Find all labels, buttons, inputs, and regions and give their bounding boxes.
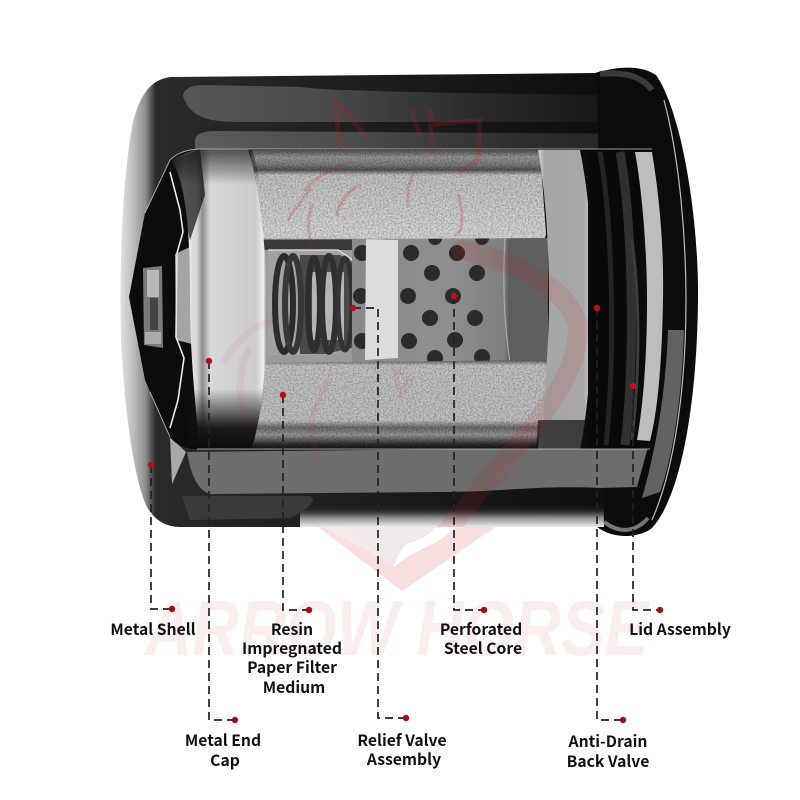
end cap crimp line xyxy=(170,172,184,428)
relief valve assembly xyxy=(264,239,352,363)
callout: anti-drain back valve: Back Valve xyxy=(567,749,649,772)
infographic: oil filter cutaway diagram xyxy=(112,68,731,770)
callout: resin impregnated paper filter medium: Impregnated xyxy=(242,636,342,659)
lid assembly gasket xyxy=(635,152,663,441)
callout: resin impregnated paper filter medium xyxy=(242,392,342,698)
callout: perforated steel core: Perforated xyxy=(440,617,522,640)
callout: resin impregnated paper filter medium: Paper Filter xyxy=(247,655,337,678)
resin paper filter lower xyxy=(250,360,548,449)
right silver band xyxy=(536,150,592,449)
perforated steel core xyxy=(352,231,548,366)
shell lower grey strip xyxy=(187,447,648,494)
callout: metal shell: Metal Shell xyxy=(110,617,196,640)
window edge line xyxy=(145,149,652,449)
callout: anti-drain back valve xyxy=(567,305,649,772)
white tape strip on core xyxy=(365,239,398,360)
shell cut highlight xyxy=(170,437,186,484)
shell lower sheen xyxy=(300,508,604,527)
resin paper filter upper xyxy=(250,150,546,240)
top shell highlight xyxy=(183,85,600,122)
callout: resin impregnated paper filter medium: Resin xyxy=(271,617,313,640)
shell left texture xyxy=(182,496,313,520)
callout: metal shell xyxy=(110,462,196,640)
callout: metal end cap xyxy=(185,358,261,771)
end cap inner nut xyxy=(143,246,196,348)
watermark: red horse emblem over filter xyxy=(225,100,578,540)
callout: relief valve assembly: Relief Valve xyxy=(357,728,447,751)
callout: anti-drain back valve: Anti-Drain xyxy=(568,729,647,752)
filter flange xyxy=(595,68,698,536)
callout: relief valve assembly xyxy=(350,305,447,770)
anti-drain back valve xyxy=(588,149,640,449)
filter grain xyxy=(250,150,548,449)
watermark text: ARROW HORSE xyxy=(143,584,650,672)
callout: metal end cap: Cap xyxy=(210,748,240,771)
cutaway window xyxy=(129,149,664,449)
callout: resin impregnated paper filter medium: Medium xyxy=(263,675,325,698)
callout: lid assembly: Lid Assembly xyxy=(629,617,731,640)
callout: relief valve assembly: Assembly xyxy=(366,747,441,770)
metal shell body xyxy=(120,73,604,527)
shell edge strip above window xyxy=(195,131,598,149)
callout: lid assembly xyxy=(629,383,731,640)
watermark: horse shape below the filter xyxy=(317,526,497,591)
callout: metal end cap: Metal End xyxy=(185,728,261,751)
metal end cap band xyxy=(165,149,269,449)
callout: perforated steel core: Steel Core xyxy=(444,636,522,659)
callout: perforated steel core xyxy=(440,293,522,659)
